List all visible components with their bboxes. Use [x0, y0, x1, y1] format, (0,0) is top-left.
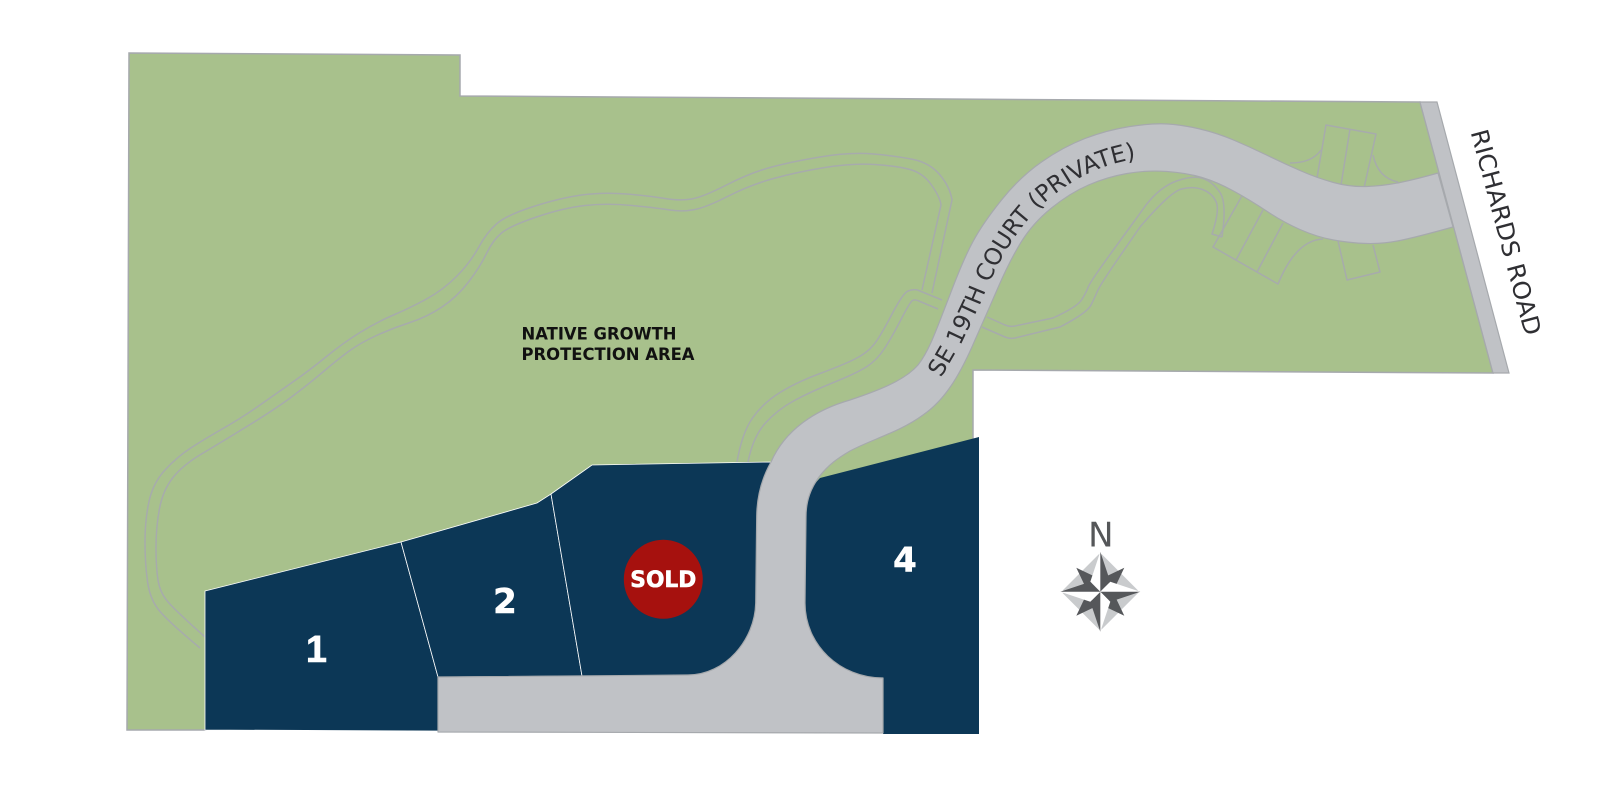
lot number 2: 2 [493, 582, 517, 622]
walking trail: long outer line [145, 153, 952, 648]
walking trail: connector inner line [748, 300, 938, 462]
walking trail: east inner line [982, 188, 1222, 338]
north label: N [1088, 516, 1114, 556]
Richards Road strip [1420, 102, 1509, 373]
parking stalls south west [1213, 194, 1323, 284]
icon: compass rose [1060, 552, 1140, 632]
walking trail: connector outer line [737, 290, 942, 462]
road: SE 19th Court with cul-de-sac [438, 124, 1453, 733]
area label: Native Growth Protection Area [522, 324, 695, 365]
walking trail: east outer line [987, 177, 1224, 326]
road label: Richards Road: RICHARDS ROAD [1465, 126, 1547, 338]
walking trail: long inner line [156, 164, 941, 637]
sold badge: SOLD [630, 568, 696, 593]
sold badge [624, 540, 703, 619]
road label: SE 19th Court (Private): SE 19TH COURT (PRIVATE) [928, 142, 1134, 376]
area label: Native Growth Protection Area: NATIVE GROWTH [522, 324, 676, 344]
lot 2 [401, 494, 582, 677]
area label: Native Growth Protection Area: PROTECTION AREA [522, 345, 695, 365]
lot number 4: 4 [893, 540, 917, 580]
parking stalls north [1290, 125, 1398, 188]
lot 1 [205, 542, 438, 731]
lot number 1: 1 [306, 629, 327, 671]
lot 4 [790, 437, 979, 734]
lot 3 [551, 462, 790, 695]
parking stall south east [1338, 241, 1380, 280]
panel: native growth protection area land [127, 53, 1493, 730]
